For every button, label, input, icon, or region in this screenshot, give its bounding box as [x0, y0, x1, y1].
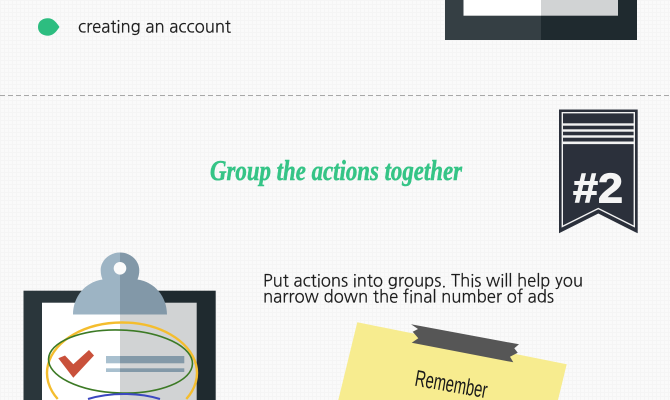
icon: monitor bottom edge — [445, 0, 637, 40]
check mark — [58, 350, 94, 378]
sticky note — [338, 322, 567, 400]
body text — [263, 273, 583, 306]
badge number: #2 — [573, 165, 623, 212]
bullet text: creating an account — [78, 18, 232, 36]
icon: clipboard checklist — [24, 252, 216, 400]
step ribbon badge #2 — [559, 110, 638, 233]
tape — [411, 324, 519, 362]
heading: Group the actions together — [210, 156, 463, 187]
yellow group ellipse — [47, 323, 197, 399]
body text: narrow down the final number of ads — [263, 288, 554, 306]
body text: Put actions into groups. This will help you — [263, 273, 583, 290]
icon: green leaf bullet — [38, 18, 60, 36]
list item: creating an account — [38, 18, 232, 36]
note paper — [338, 322, 567, 400]
checklist lines — [106, 356, 184, 372]
green group ellipse — [47, 328, 194, 395]
clipboard board — [24, 291, 216, 400]
clipboard clip — [73, 252, 167, 314]
blue group ellipse — [88, 394, 160, 399]
